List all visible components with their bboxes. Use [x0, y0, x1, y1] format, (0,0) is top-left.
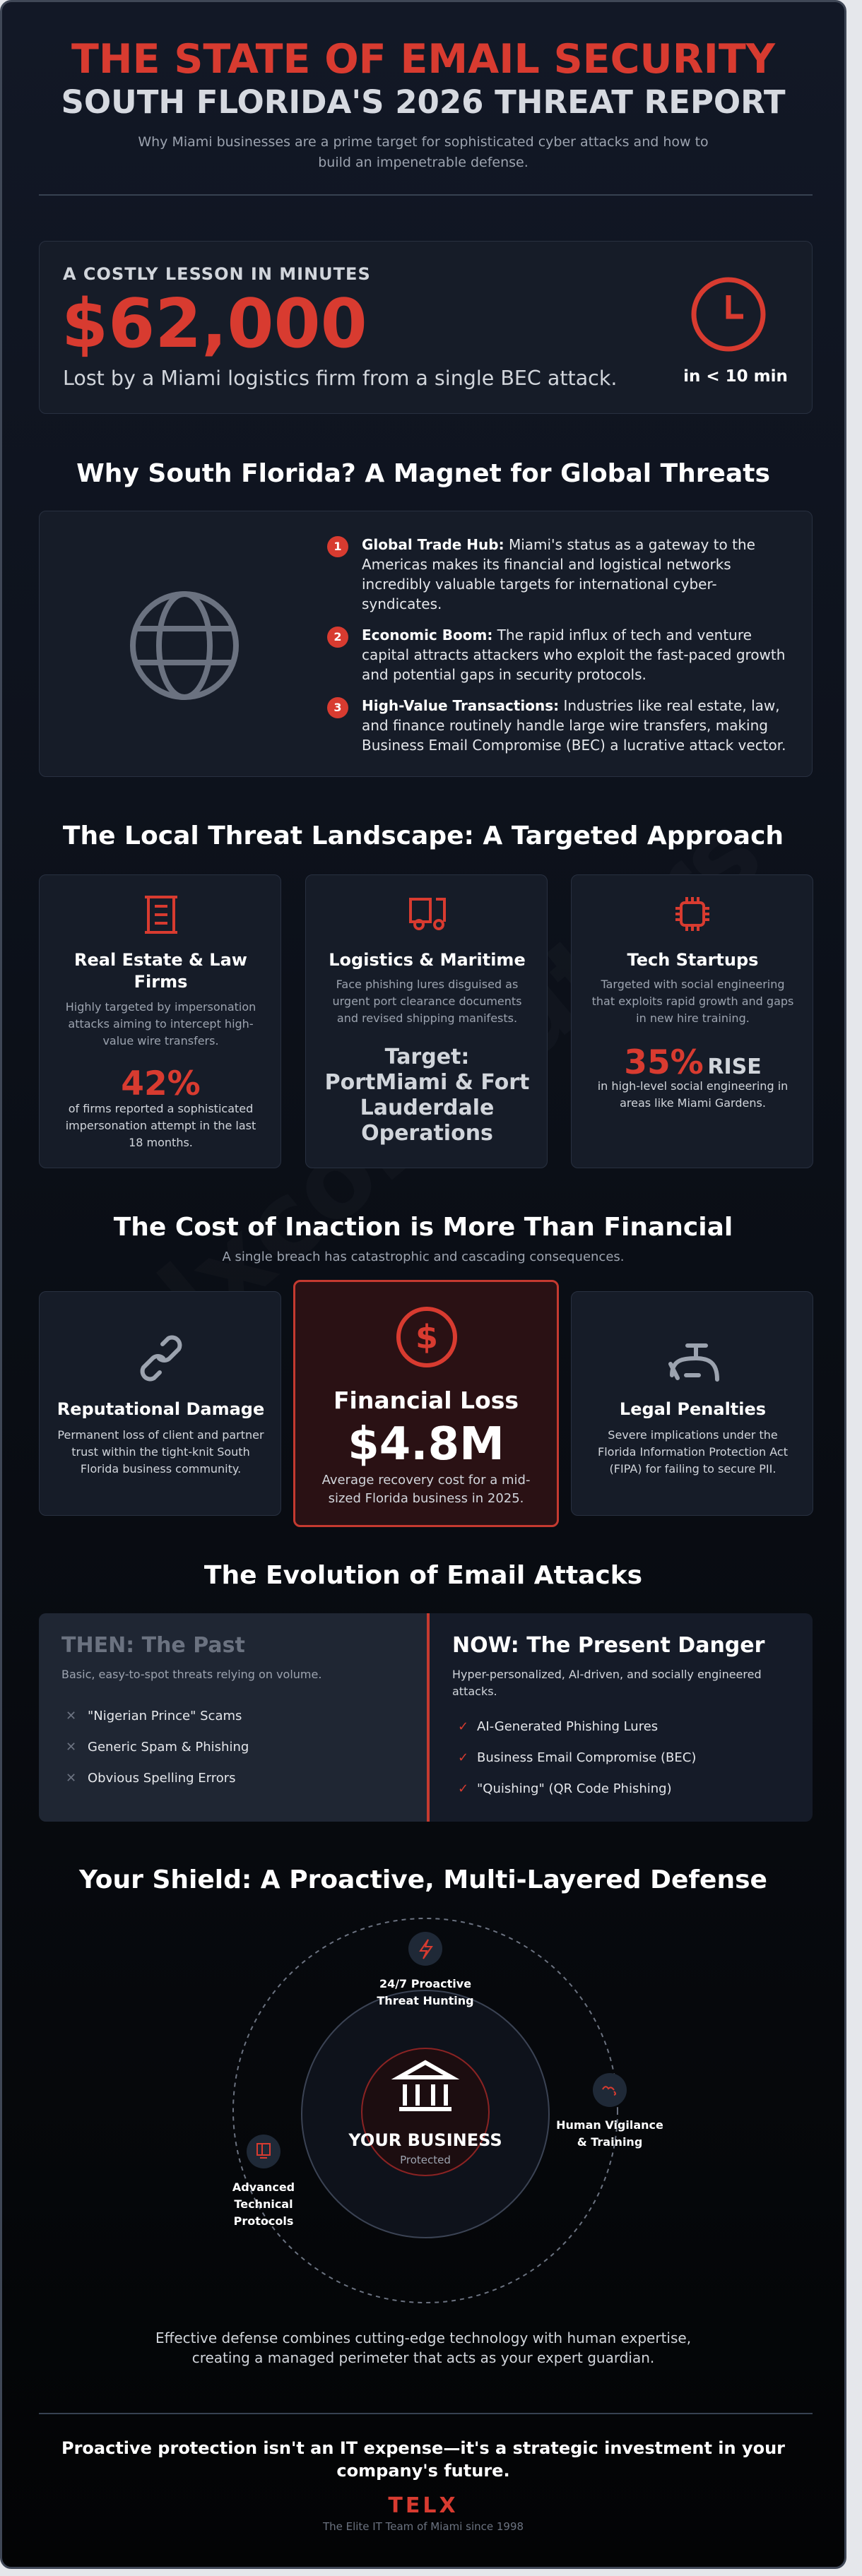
panel: financial loss — [293, 1280, 559, 1527]
node: technical protocols: Advanced — [232, 2180, 295, 2194]
icon: clock — [691, 277, 766, 352]
list: then: Generic Spam & Phishing — [88, 1740, 249, 1755]
big number: $62,000 — [61, 285, 367, 363]
list: then: "Nigerian Prince" Scams — [88, 1709, 242, 1723]
list: now: AI-Generated Phishing Lures — [477, 1719, 658, 1734]
panel: costly lesson — [39, 241, 813, 414]
panel: reputational damage — [39, 1291, 281, 1516]
core: your business: YOUR BUSINESS — [348, 2130, 502, 2150]
stat: $4.8M — [348, 1418, 504, 1471]
list: then — [66, 1709, 249, 1786]
icon: document — [145, 896, 177, 934]
item 1: Global Trade Hub: Miami's status as a gateway to the Americas makes its financial and logistical networks incredibly valuable targets for international cyber-syndicates. — [362, 536, 755, 612]
list: now — [458, 1719, 696, 1796]
list: now: ✓ — [458, 1750, 468, 1765]
subtitle: SOUTH FLORIDA'S 2026 THREAT REPORT — [61, 83, 786, 121]
icon: globe — [130, 591, 239, 700]
title: Real Estate & Law Firms — [74, 950, 247, 992]
subheading: A single breach has catastrophic and cascading consequences. — [222, 1250, 625, 1264]
icon: chip — [675, 897, 709, 931]
node: human vigilance: & Training — [577, 2135, 642, 2149]
list: now: "Quishing" (QR Code Phishing) — [477, 1781, 672, 1796]
item 2: Economic Boom: The rapid influx of tech and venture capital attracts attackers who exploit the fast-paced growth and potential gaps in security protocols. — [362, 627, 785, 683]
stat: 35% RISE — [624, 1043, 762, 1082]
panel: tech startups — [571, 874, 813, 1168]
description: Targeted with social engineering that exploits rapid growth and gaps in new hire training. — [592, 978, 793, 1025]
description: Highly targeted by impersonation attacks aiming to intercept high-value wire transfers. — [66, 1000, 256, 1047]
heading: your shield: Your Shield: A Proactive, Multi-Layered Defense — [79, 1865, 767, 1894]
heading: evolution: The Evolution of Email Attacks — [204, 1561, 642, 1590]
panel: why south florida — [39, 511, 813, 777]
list: now: Business Email Compromise (BEC) — [477, 1750, 696, 1765]
item 2: 2 — [333, 630, 342, 643]
title: THE STATE OF EMAIL SECURITY — [71, 36, 775, 83]
closing statement: Proactive protection isn't an IT expense—it's a strategic investment in your company's future. — [61, 2438, 785, 2481]
icon: link — [140, 1335, 182, 1382]
description: Severe implications under the — [608, 1428, 778, 1442]
core: your business: Protected — [400, 2154, 451, 2166]
column: then: Basic, easy-to-spot threats relying on volume. — [61, 1668, 321, 1681]
stat: 42% — [121, 1064, 201, 1103]
node: technical protocols — [232, 2135, 295, 2228]
icon: scales — [668, 1343, 719, 1382]
title: Financial Loss — [333, 1387, 519, 1414]
list: then: Obvious Spelling Errors — [88, 1771, 236, 1786]
node: human vigilance: Human Vigilance — [556, 2118, 663, 2132]
list: now: ✓ — [458, 1719, 468, 1734]
node: technical protocols: Protocols — [234, 2214, 293, 2228]
list: then: ✕ — [66, 1771, 76, 1786]
text: defense summary: Effective defense combines cutting-edge technology with human expertise, creating a managed perimeter that acts as your expert guardian. — [155, 2329, 691, 2366]
panel: real estate — [39, 874, 281, 1168]
title: Legal Penalties — [620, 1399, 766, 1419]
node: threat hunting — [377, 1932, 474, 2007]
list — [327, 536, 786, 754]
column: now: Hyper-personalized, AI-driven, and socially engineered attacks. — [452, 1668, 762, 1698]
time label: in < 10 min — [683, 367, 788, 386]
title: Tech Startups — [627, 950, 758, 970]
item 3: High-Value Transactions: Industries like real estate, law, and finance routinely handle large wire transfers, making Business Email Compromise (BEC) a lucrative attack vector. — [362, 697, 786, 754]
watermark: telxcomputers — [45, 790, 784, 1438]
target: Target: PortMiami & Fort Lauderdale Operations — [325, 1045, 529, 1146]
heading: why south florida: Why South Florida? A Magnet for Global Threats — [76, 459, 770, 488]
node: technical protocols: Technical — [234, 2197, 293, 2211]
node: threat hunting: Threat Hunting — [377, 1994, 474, 2007]
icon: dollar — [396, 1307, 457, 1367]
description: Average recovery cost for a mid-sized Florida business in 2025. — [322, 1473, 530, 1506]
caption: Lost by a Miami logistics firm from a single BEC attack. — [63, 367, 617, 390]
node: human vigilance — [556, 2073, 663, 2149]
core: your business — [348, 2048, 502, 2176]
description — [598, 1428, 788, 1476]
heading: cost of inaction: The Cost of Inaction is More Than Financial — [114, 1213, 733, 1242]
heading: local threat landscape: The Local Threat Landscape: A Targeted Approach — [63, 821, 784, 850]
tagline: The Elite IT Team of Miami since 1998 — [323, 2520, 524, 2533]
column: then: THEN: The Past — [61, 1633, 245, 1658]
column: now — [452, 1633, 764, 1796]
list: then: ✕ — [66, 1709, 76, 1723]
column: now: NOW: The Present Danger — [452, 1633, 764, 1658]
icon: dollar: $ — [415, 1318, 438, 1356]
intro text: Why Miami businesses are a prime target for sophisticated cyber attacks and how to build an impenetrable defense. — [138, 134, 709, 170]
icon: truck — [409, 898, 446, 930]
item 1: 1 — [333, 540, 342, 553]
description: Face phishing lures disguised as urgent port clearance documents and revised shipping manifests. — [332, 978, 522, 1025]
node: threat hunting: 24/7 Proactive — [379, 1977, 471, 1990]
list: then: ✕ — [66, 1740, 76, 1755]
panel: legal penalties — [571, 1291, 813, 1516]
list: now: ✓ — [458, 1781, 468, 1796]
title: Reputational Damage — [57, 1399, 264, 1419]
panel: real estate: of firms reported a sophisticated impersonation attempt in the last 18 months. — [66, 1102, 256, 1149]
label: A COSTLY LESSON IN MINUTES — [63, 264, 371, 284]
panel: tech startups: in high-level social engineering in areas like Miami Gardens. — [598, 1079, 788, 1110]
diagram: defense layers — [232, 1918, 663, 2303]
panel: logistics — [305, 874, 548, 1168]
item 3: 3 — [333, 701, 342, 714]
description: Florida Information Protection Act (FIPA) for failing to secure PII. — [598, 1445, 788, 1476]
description: Permanent loss of client and partner trust within the tight-knit South Florida business community. — [57, 1428, 264, 1476]
panel: evolution — [39, 1613, 813, 1822]
title: Logistics & Maritime — [329, 950, 526, 970]
column: then — [39, 1613, 427, 1822]
brand: TELX: TELX — [388, 2493, 459, 2518]
